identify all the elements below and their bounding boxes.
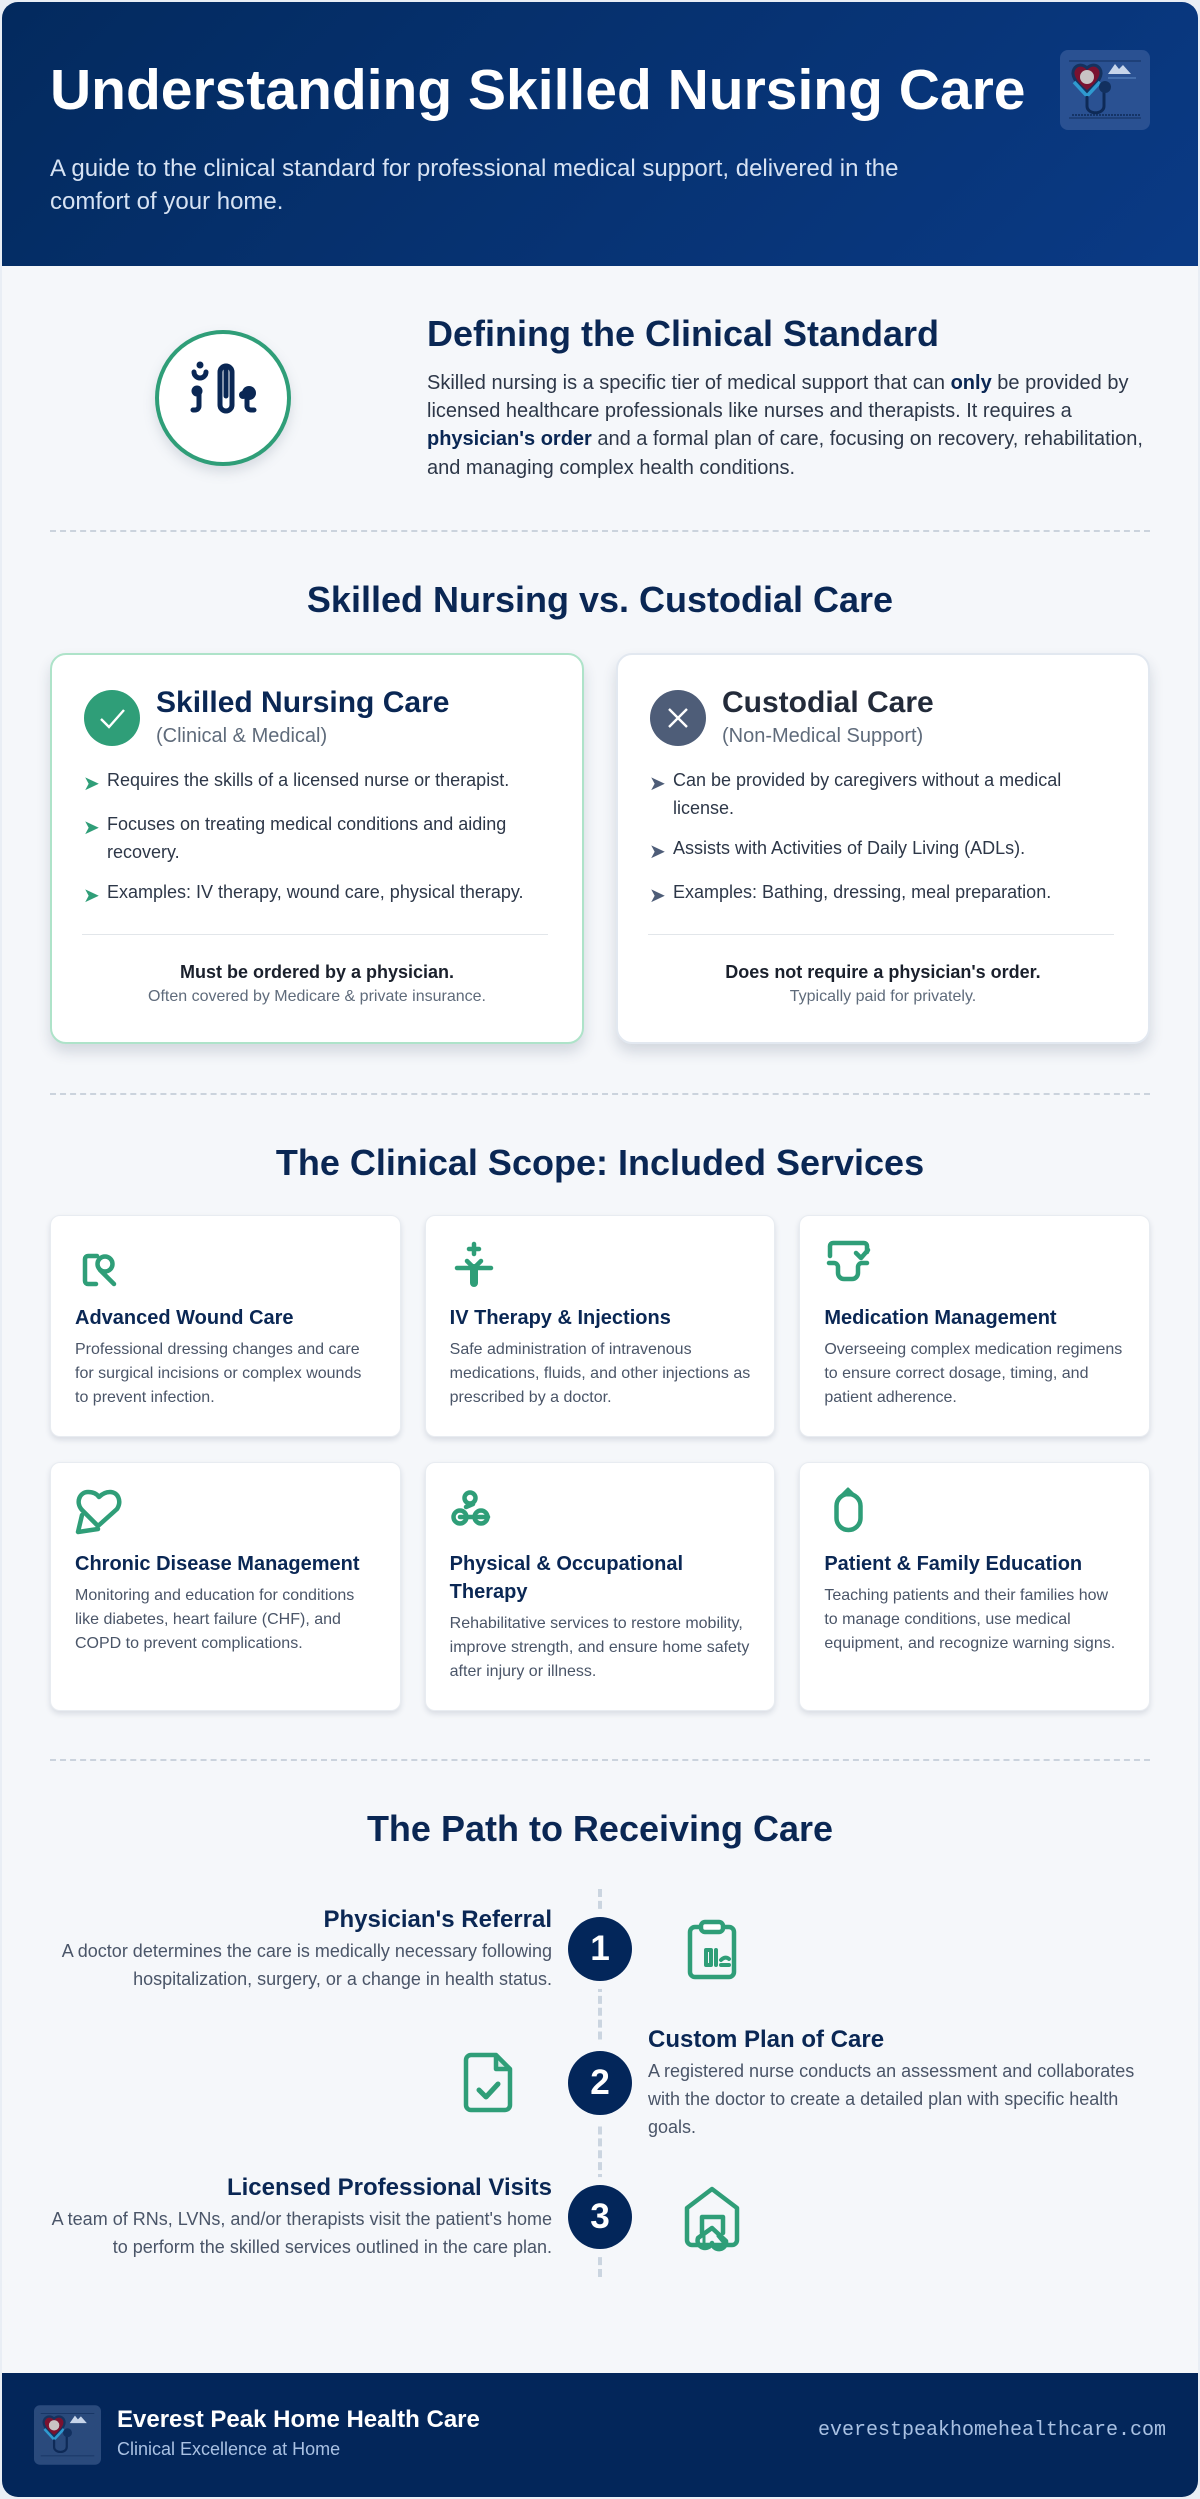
service description: equipment, and recognize warning signs. <box>824 1635 1115 1652</box>
step 1 description <box>62 1941 552 1989</box>
footer banner <box>2 2373 1198 2497</box>
icon: document check <box>464 2052 512 2112</box>
service description: prescribed by a doctor. <box>450 1389 612 1406</box>
bullet text 1: license. <box>673 798 734 818</box>
callout: physician order: Must be ordered by a physician. <box>180 962 454 982</box>
timeline: path to receiving care <box>52 1889 1134 2277</box>
service title: Therapy <box>450 1581 527 1603</box>
bullet 1: ➤ <box>83 771 100 795</box>
service description: after injury or illness. <box>450 1663 596 1680</box>
body text: and managing complex health conditions. <box>427 457 795 479</box>
service description: to prevent infection. <box>75 1389 215 1406</box>
service card: physical therapy <box>425 1462 775 1711</box>
icon: cross <box>650 690 706 746</box>
service description: medications, fluids, and other injections as <box>450 1365 750 1382</box>
step 3 title: Licensed Professional Visits <box>227 2174 552 2201</box>
step 2 description: with the doctor to create a detailed plan with specific health <box>648 2089 1118 2109</box>
service description: COPD to prevent complications. <box>75 1635 303 1652</box>
bullet text 1: Can be provided by caregivers without a medical <box>673 770 1061 790</box>
icon: footer logo <box>34 2405 101 2465</box>
panel: skilled nursing care <box>50 653 584 1044</box>
bullet text 1 <box>673 770 1061 818</box>
service title: Patient & Family Education <box>824 1553 1082 1575</box>
bullet text 2: recovery. <box>107 842 180 862</box>
heading: clinical scope: The Clinical Scope: Included Services <box>276 1142 924 1183</box>
service description <box>75 1587 354 1652</box>
step 2 description: goals. <box>648 2117 696 2137</box>
bullet 1: ➤ <box>649 771 666 795</box>
icon: home care <box>684 2186 740 2252</box>
step 3 description: to perform the skilled services outlined in the care plan. <box>113 2237 552 2257</box>
icon: clipboard <box>688 1920 736 1980</box>
service description: to manage conditions, use medical <box>824 1611 1071 1628</box>
step 1 description: hospitalization, surgery, or a change in health status. <box>133 1969 552 1989</box>
bullet text 3: Examples: Bathing, dressing, meal preparation. <box>673 882 1051 902</box>
icon: education <box>834 1487 863 1532</box>
card subtitle: (Non-Medical Support) <box>722 725 923 747</box>
step 1 number: 1 <box>590 1929 610 1968</box>
service description: like diabetes, heart failure (CHF), and <box>75 1611 341 1628</box>
icon: clinical instruments badge <box>152 330 294 476</box>
heading: Defining the Clinical Standard <box>427 313 939 354</box>
bullet 3: ➤ <box>83 883 100 907</box>
company name: Everest Peak Home Health Care <box>117 2406 480 2433</box>
service card: iv therapy <box>425 1215 775 1437</box>
service description: patient adherence. <box>824 1389 957 1406</box>
heading: skilled vs custodial: Skilled Nursing vs. Custodial Care <box>307 579 893 620</box>
step 3 description <box>52 2209 552 2257</box>
service card: education <box>799 1462 1150 1711</box>
header banner <box>2 2 1198 266</box>
body text <box>427 372 1143 479</box>
service description <box>450 1615 750 1680</box>
heading: path to care: The Path to Receiving Care <box>367 1808 833 1849</box>
service title: Medication Management <box>824 1307 1057 1329</box>
step 1 title: Physician's Referral <box>324 1906 552 1933</box>
service description: Overseeing complex medication regimens <box>824 1341 1122 1358</box>
bullet 2: ➤ <box>83 815 100 839</box>
icon: therapy <box>451 1490 490 1526</box>
service description: Rehabilitative services to restore mobility, <box>450 1615 743 1632</box>
service title <box>450 1553 683 1603</box>
service title: Advanced Wound Care <box>75 1307 294 1329</box>
website url: everestpeakhomehealthcare.com <box>818 2419 1166 2442</box>
service description: Safe administration of intravenous <box>450 1341 692 1358</box>
section: defining the clinical standard <box>152 313 1143 479</box>
icon: medication <box>826 1240 870 1282</box>
bullet text 3: Examples: IV therapy, wound care, physical therapy. <box>107 882 524 902</box>
icon: heart <box>76 1490 122 1534</box>
card title: Custodial Care <box>722 686 934 719</box>
panel: custodial care <box>616 653 1150 1044</box>
icon: company logo <box>1060 50 1150 130</box>
step 2 description: A registered nurse conducts an assessment and collaborates <box>648 2061 1134 2081</box>
bullet 2: ➤ <box>649 839 666 863</box>
body text: physician's order and a formal plan of care, focusing on recovery, rehabilitation, <box>427 428 1143 450</box>
step 1 description: A doctor determines the care is medically necessary following <box>62 1941 552 1961</box>
step 2 number <box>568 2051 632 2115</box>
step 2 number: 2 <box>590 2063 610 2102</box>
icon: wound care <box>82 1254 116 1286</box>
service description: to ensure correct dosage, timing, and <box>824 1365 1088 1382</box>
step 3 number: 3 <box>590 2197 610 2236</box>
tagline: Clinical Excellence at Home <box>117 2439 340 2459</box>
note: payment: Typically paid for privately. <box>790 988 976 1005</box>
step 1 number <box>568 1917 632 1981</box>
bullet text 2: Assists with Activities of Daily Living (ADLs). <box>673 838 1025 858</box>
subtitle: A guide to the clinical standard for professional medical support, delivered in the <box>50 155 898 182</box>
subtitle <box>50 155 898 215</box>
service title: Physical & Occupational <box>450 1553 683 1575</box>
service description: improve strength, and ensure home safety <box>450 1639 749 1656</box>
icon: iv therapy <box>454 1242 494 1287</box>
body text: Skilled nursing is a specific tier of medical support that can only be provided by <box>427 372 1128 394</box>
body text: licensed healthcare professionals like nurses and therapists. It requires a <box>427 400 1072 422</box>
bullet text 1: Requires the skills of a licensed nurse or therapist. <box>107 770 509 790</box>
service title: Chronic Disease Management <box>75 1553 360 1575</box>
card subtitle: (Clinical & Medical) <box>156 725 327 747</box>
step 2 description <box>648 2061 1134 2137</box>
bullet text 2: Focuses on treating medical conditions and aiding <box>107 814 506 834</box>
title: Understanding Skilled Nursing Care <box>50 58 1026 122</box>
service card: medication management <box>799 1215 1150 1437</box>
service card: chronic disease <box>50 1462 401 1711</box>
step 3 number <box>568 2185 632 2249</box>
service description: Monitoring and education for conditions <box>75 1587 354 1604</box>
service description: Professional dressing changes and care <box>75 1341 360 1358</box>
service description <box>824 1341 1122 1406</box>
service title: IV Therapy & Injections <box>450 1307 671 1329</box>
icon: check <box>84 690 140 746</box>
service description <box>75 1341 361 1406</box>
service description <box>450 1341 750 1406</box>
step 2 title: Custom Plan of Care <box>648 2026 884 2053</box>
bullet 3: ➤ <box>649 883 666 907</box>
service description <box>824 1587 1115 1652</box>
callout: no order required: Does not require a physician's order. <box>725 962 1041 982</box>
service description: for surgical incisions or complex wounds <box>75 1365 361 1382</box>
service card: wound care <box>50 1215 401 1437</box>
step 3 description: A team of RNs, LVNs, and/or therapists visit the patient's home <box>52 2209 552 2229</box>
card title: Skilled Nursing Care <box>156 686 449 719</box>
bullet text 2 <box>107 814 506 862</box>
service description: Teaching patients and their families how <box>824 1587 1108 1604</box>
subtitle: comfort of your home. <box>50 188 283 215</box>
note: coverage: Often covered by Medicare & private insurance. <box>148 988 486 1005</box>
